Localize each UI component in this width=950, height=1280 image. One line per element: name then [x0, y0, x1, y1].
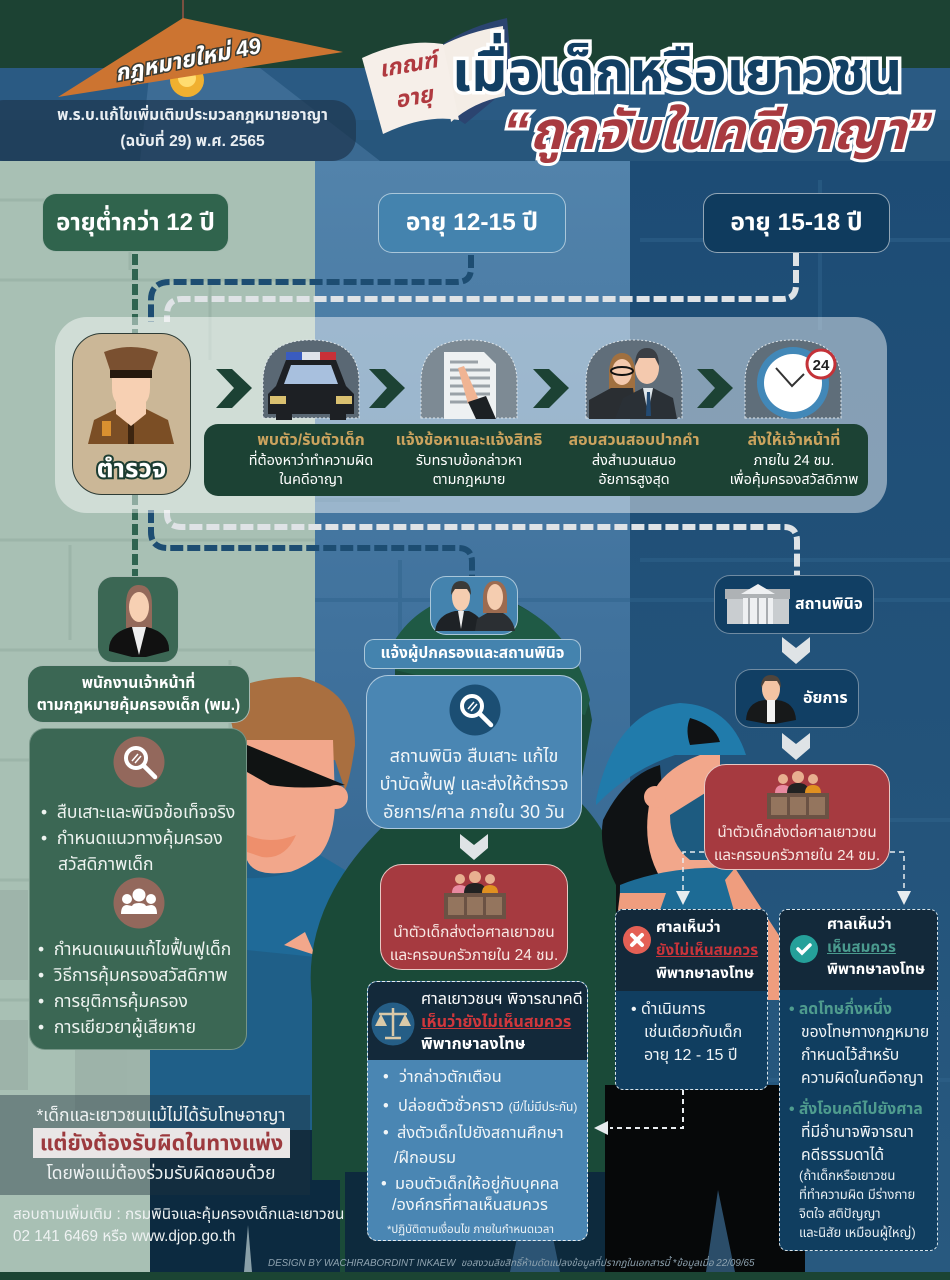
decision bullet list: •	[381, 1175, 387, 1193]
court referral text: นำตัวเด็กส่งต่อศาลเยาวชน	[393, 924, 555, 941]
bullets: plan: • กำหนดแผนแก้ไขฟื้นฟูเด็ก	[38, 939, 231, 959]
notify guardians label	[364, 639, 581, 669]
icon: police officer	[88, 347, 174, 444]
icon: magnifier	[450, 684, 500, 736]
appropriate list: transfer case: • สั่งโอนคดีไปยังศาล	[789, 1101, 923, 1118]
appropriate list: reduce penalty: • ลดโทษกึ่งหนึ่ง	[789, 1001, 892, 1018]
designer credit: DESIGN BY WACHIRABORDINT INKAEW ขอสงวนลิขสิทธิ์ห้ามดัดแปลงข้อมูลที่ปรากฏในเอกสารนี้ *ข้อมูลเมื่อ 22/09/65	[268, 1258, 754, 1269]
age heading: under 12: อายุต่ำกว่า 12 ปี	[56, 209, 215, 236]
appropriate note	[799, 1168, 916, 1240]
note box: civil liability	[0, 1095, 310, 1195]
appropriate header text	[827, 916, 925, 978]
age heading: 12-15: อายุ 12-15 ปี	[406, 209, 538, 236]
step 4 text: ภายใน 24 ชม.	[754, 452, 834, 468]
step 4 text	[730, 428, 858, 488]
step 2 text: รับทราบข้อกล่าวหา	[416, 452, 522, 468]
note highlighted text: แต่ยังต้องรับผิดในทางแพ่ง	[40, 1131, 283, 1155]
panel: police procedure	[55, 317, 887, 513]
court referral text: และครอบครัวภายใน 24 ชม.	[390, 947, 558, 964]
observation text	[380, 746, 568, 822]
icon: two investigators	[586, 340, 682, 419]
bullets: plan	[38, 937, 231, 1038]
observation text: บำบัดฟื้นฟู และส่งให้ตำรวจ	[380, 774, 568, 794]
appropriate list: transfer case	[789, 1098, 923, 1164]
not appropriate header	[616, 910, 767, 991]
not appropriate bullet	[631, 1001, 742, 1064]
decision bullet list: •	[383, 1097, 389, 1115]
hanging lamp with law badge shade	[58, 0, 343, 97]
decision bullet list: •	[383, 1068, 389, 1086]
not appropriate header text: ยังไม่เห็นสมควร	[656, 942, 758, 959]
arrows: process chevrons	[216, 369, 733, 408]
icon: court bench	[444, 871, 506, 919]
police tile	[72, 333, 191, 495]
not appropriate bullet: • ดำเนินการ	[631, 1001, 706, 1018]
icon: building	[725, 584, 790, 624]
appropriate list: reduce penalty: ของโทษทางกฎหมาย	[801, 1024, 929, 1041]
decision header	[368, 982, 587, 1060]
book label: อายุ	[393, 81, 435, 113]
contact information: สอบถามเพิ่มเติม : กรมพินิจและคุ้มครองเด็กและเยาวชน	[13, 1206, 344, 1223]
icon: police car	[262, 340, 360, 420]
bullets: plan: • การเยียวยาผู้เสียหาย	[38, 1017, 196, 1037]
icon: clock with 24 badge	[744, 340, 842, 419]
step 4 text: ส่งให้เจ้าหน้าที่	[748, 432, 840, 449]
panel: prosecutor	[735, 669, 859, 728]
contact information: 02 141 6469 หรือ www.djop.go.th	[13, 1228, 236, 1245]
court referral text	[390, 924, 558, 964]
court referral text: นำตัวเด็กส่งต่อศาลเยาวชน	[717, 824, 877, 841]
appropriate header text: พิพากษาลงโทษ	[827, 961, 925, 978]
icon: people	[114, 878, 164, 928]
appropriate header	[780, 910, 937, 990]
age heading: 12-15	[378, 193, 566, 253]
panel: juvenile court decision 12-15	[367, 981, 588, 1241]
step 2 text: แจ้งข้อหาและแจ้งสิทธิ	[396, 432, 542, 449]
subtitle: act name pill: พ.ร.บ.แก้ไขเพิ่มเติมประมวลกฎหมายอาญา	[57, 107, 328, 124]
subtitle: act name pill	[0, 100, 356, 161]
observation text: อัยการ/ศาล ภายใน 30 วัน	[383, 802, 565, 822]
icon: magnifier	[114, 736, 164, 788]
panel: observation centre 15-18	[714, 575, 874, 634]
decision bullet list: มอบตัวเด็กให้อยู่กับบุคคล	[395, 1175, 559, 1193]
step 4 text: เพื่อคุ้มครองสวัสดิภาพ	[730, 472, 858, 488]
observation text: สถานพินิจ สืบเสาะ แก้ไข	[390, 746, 558, 766]
step 1 text: พบตัว/รับตัวเด็ก	[257, 432, 365, 449]
decision bullet list	[381, 1068, 577, 1214]
main title second line: “ถูกจับในคดีอาญา”	[503, 102, 932, 161]
open book with age criteria label	[362, 18, 511, 134]
decision bullet list: •	[383, 1124, 389, 1142]
step 3 text	[568, 432, 700, 488]
decision bullet list: /ฝึกอบรม	[394, 1149, 456, 1167]
icon: document with pointing hand	[420, 340, 518, 419]
appropriate note: (ถ้าเด็กหรือเยาวชน	[799, 1168, 895, 1183]
bullets: plan: • การยุติการคุ้มครอง	[38, 991, 188, 1011]
police label: ตำรวจ	[97, 453, 166, 483]
step 3 text: ส่งสำนวนเสนอ	[592, 452, 676, 468]
icon: court bench	[767, 771, 829, 819]
icon: clock with 24 badge: 24	[813, 357, 830, 374]
not appropriate header text: ศาลเห็นว่า	[656, 919, 721, 936]
label: สถานพินิจ	[795, 596, 863, 613]
appropriate header text: เห็นสมควร	[827, 938, 896, 956]
panel: 12-15 guardians icon	[430, 576, 518, 635]
process description bar	[204, 424, 868, 496]
subtitle: act name pill: (ฉบับที่ 29) พ.ศ. 2565	[120, 133, 265, 150]
court referral text: และครอบครัวภายใน 24 ชม.	[714, 847, 880, 864]
lamp badge text: กฎหมายใหม่ 49	[113, 33, 263, 86]
appropriate list: transfer case: ที่มีอำนาจพิจารณา	[801, 1124, 914, 1141]
label: อัยการ	[803, 690, 848, 707]
decision bullet list: ว่ากล่าวตักเตือน	[399, 1068, 502, 1086]
main title: เมื่อเด็กหรือเยาวชน	[452, 40, 902, 103]
decision header text: ศาลเยาวชนฯ พิจารณาคดี	[421, 990, 583, 1008]
appropriate note: ที่ทำความผิด มีร่างกาย	[799, 1187, 915, 1202]
panel: observation centre box	[366, 675, 582, 829]
icon: check	[790, 935, 818, 963]
appropriate list: transfer case: คดีธรรมดาได้	[801, 1147, 884, 1164]
icon: prosecutor	[746, 675, 796, 724]
appropriate note: จิตใจ สติปัญญา	[799, 1206, 881, 1221]
note text bottom: โดยพ่อแม่ต้องร่วมรับผิดชอบด้วย	[46, 1163, 276, 1183]
panel: court referral 12-15	[380, 864, 568, 970]
panel: court referral 15-18	[704, 764, 890, 870]
book label: เกณฑ์	[377, 46, 439, 82]
step 3 text: สอบสวนสอบปากคำ	[568, 432, 700, 449]
decision footnote: *ปฏิบัติตามเงื่อนไข ภายในกำหนดเวลา	[387, 1224, 554, 1236]
panel: under 12 officer icon	[97, 576, 179, 663]
decision header text	[421, 990, 583, 1053]
appropriate list: reduce penalty: กำหนดไว้สำหรับ	[801, 1047, 899, 1064]
bullets: investigate	[41, 802, 235, 874]
step 1 text: ในคดีอาญา	[279, 472, 343, 488]
book label	[377, 46, 439, 113]
appropriate note: และนิสัย เหมือนผู้ใหญ่)	[799, 1225, 916, 1240]
appropriate list: reduce penalty: ความผิดในคดีอาญา	[801, 1070, 924, 1087]
panel: under 12 duties	[29, 728, 247, 1050]
court referral text	[714, 824, 880, 864]
step 1 text	[249, 431, 373, 488]
appropriate list: reduce penalty	[789, 998, 929, 1087]
age heading: under 12	[42, 193, 229, 252]
arrows: white chevrons	[460, 637, 810, 860]
decision bullet list: ส่งตัวเด็กไปยังสถานศึกษา	[397, 1124, 564, 1142]
step 3 text: อัยการสูงสุด	[598, 472, 670, 488]
decision header text: เห็นว่ายังไม่เห็นสมควร	[421, 1012, 571, 1030]
bullets: plan: • วิธีการคุ้มครองสวัสดิภาพ	[38, 965, 228, 985]
note text top: *เด็กและเยาวชนแม้ไม่ได้รับโทษอาญา	[36, 1105, 286, 1125]
icon: cross	[623, 926, 651, 954]
panel: court not appropriate	[615, 909, 768, 1090]
under 12 officer title: ตามกฎหมายคุ้มครองเด็ก (พม.)	[37, 697, 240, 714]
notify guardians label: แจ้งผู้ปกครองและสถานพินิจ	[380, 645, 564, 662]
not appropriate bullet: อายุ 12 - 15 ปี	[644, 1047, 738, 1064]
not appropriate header text	[656, 918, 758, 982]
contact information	[13, 1204, 344, 1245]
decision bullet list: ปล่อยตัวชั่วคราว (มี/ไม่มีประกัน)	[398, 1097, 577, 1115]
age heading: 15-18: อายุ 15-18 ปี	[730, 209, 863, 236]
bullets: investigate: • กำหนดแนวทางคุ้มครอง	[41, 828, 223, 848]
appropriate header text: ศาลเห็นว่า	[827, 916, 892, 933]
step 2 text	[396, 431, 542, 488]
age heading: 15-18	[703, 193, 890, 253]
not appropriate bullet: เช่นเดียวกับเด็ก	[644, 1024, 742, 1041]
under 12 officer title: พนักงานเจ้าหน้าที่	[82, 675, 195, 692]
step 1 text: ที่ต้องหาว่าทำความผิด	[249, 452, 373, 468]
bullets: investigate: • สืบเสาะและพินิจข้อเท็จจริง	[41, 802, 235, 822]
decision header text: พิพากษาลงโทษ	[421, 1035, 526, 1053]
bullets: investigate: สวัสดิภาพเด็ก	[58, 854, 154, 874]
panel: court appropriate	[779, 909, 938, 1251]
icon: scales	[372, 1002, 414, 1046]
step 2 text: ตามกฎหมาย	[433, 472, 505, 488]
decision bullet list: /องค์กรที่ศาลเห็นสมควร	[392, 1196, 548, 1214]
not appropriate header text: พิพากษาลงโทษ	[656, 965, 754, 982]
under 12 officer title	[27, 665, 250, 723]
